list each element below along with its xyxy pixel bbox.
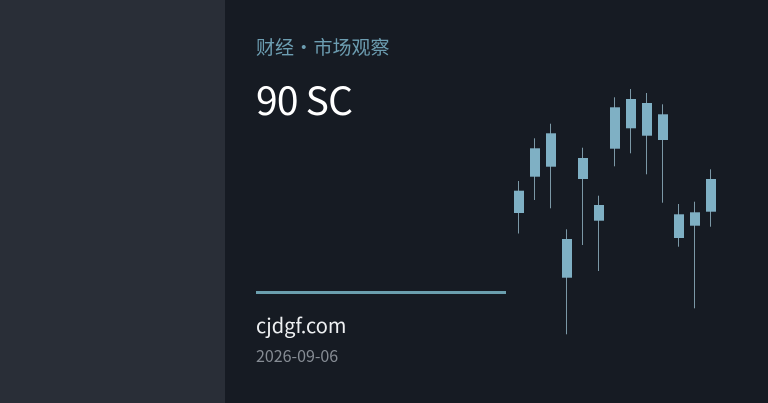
title: 90 SC <box>256 71 352 127</box>
accent rule <box>256 291 506 294</box>
eyebrow heading: 财经 · 市场观察 <box>256 33 390 60</box>
date: 2026-09-06 <box>256 343 338 367</box>
panel: left sidebar <box>0 0 225 403</box>
site name: cjdgf.com <box>256 310 346 339</box>
